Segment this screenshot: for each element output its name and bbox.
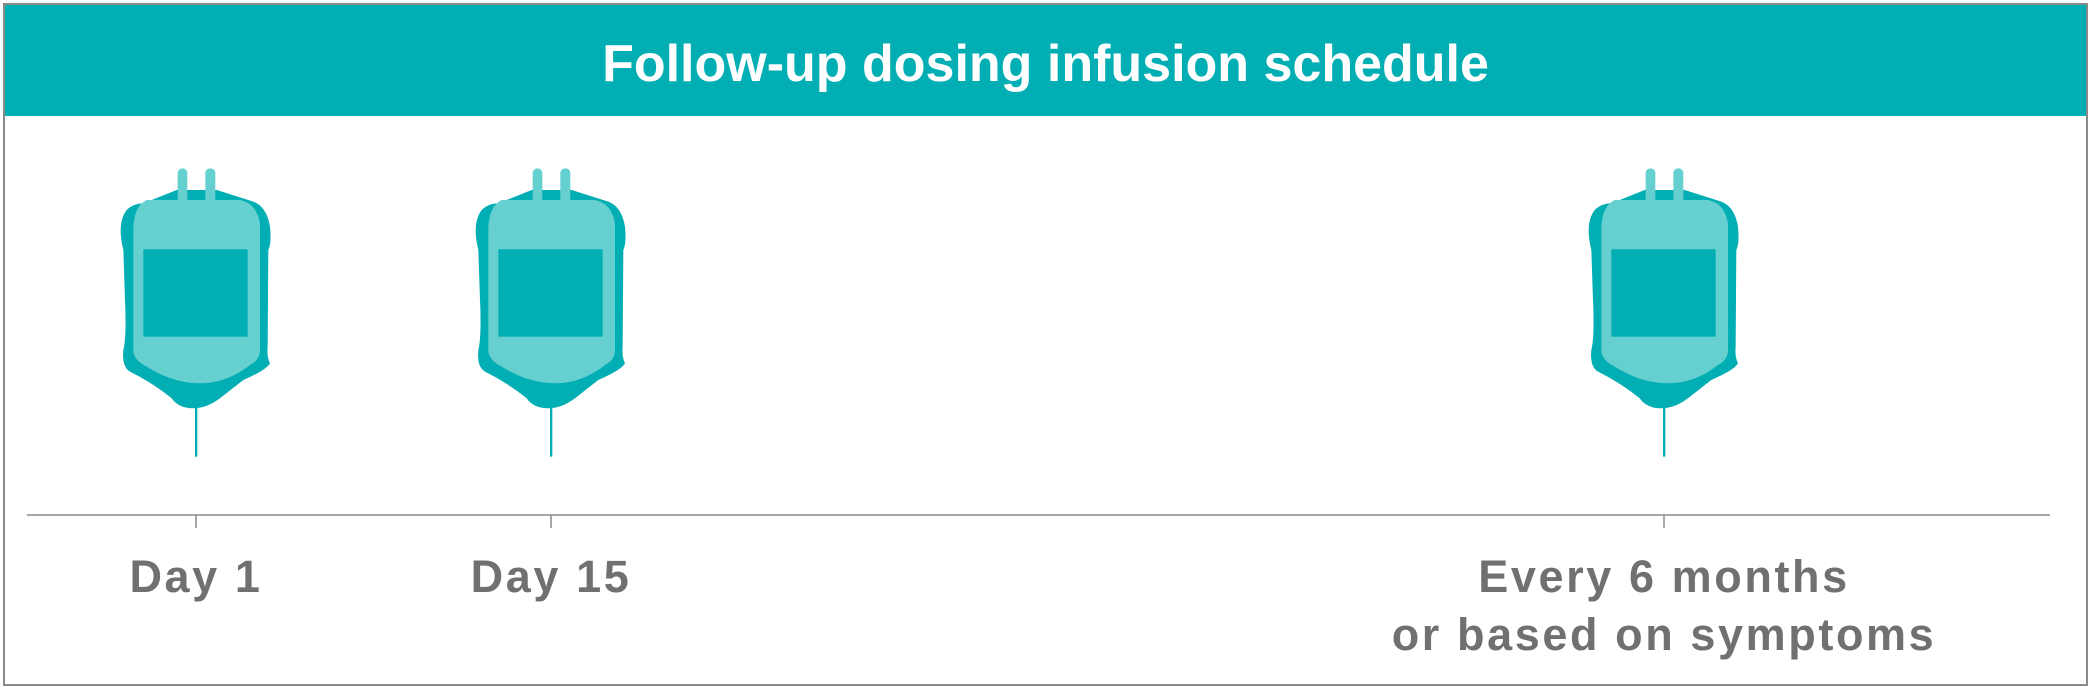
icon: IV bag 6 months bbox=[1588, 168, 1739, 457]
label: Day 1: Day 1 bbox=[129, 551, 263, 602]
icon: IV bag day 1 bbox=[120, 168, 271, 457]
icon: IV bag day 15 bbox=[476, 168, 626, 457]
label: every 6 months bbox=[1392, 551, 1936, 660]
title: Follow-up dosing infusion schedule bbox=[602, 35, 1489, 93]
label: every 6 months: or based on symptoms bbox=[1392, 609, 1936, 660]
title bbox=[5, 5, 2086, 116]
label: every 6 months: Every 6 months bbox=[1478, 551, 1850, 602]
label: Day 15: Day 15 bbox=[471, 551, 631, 602]
